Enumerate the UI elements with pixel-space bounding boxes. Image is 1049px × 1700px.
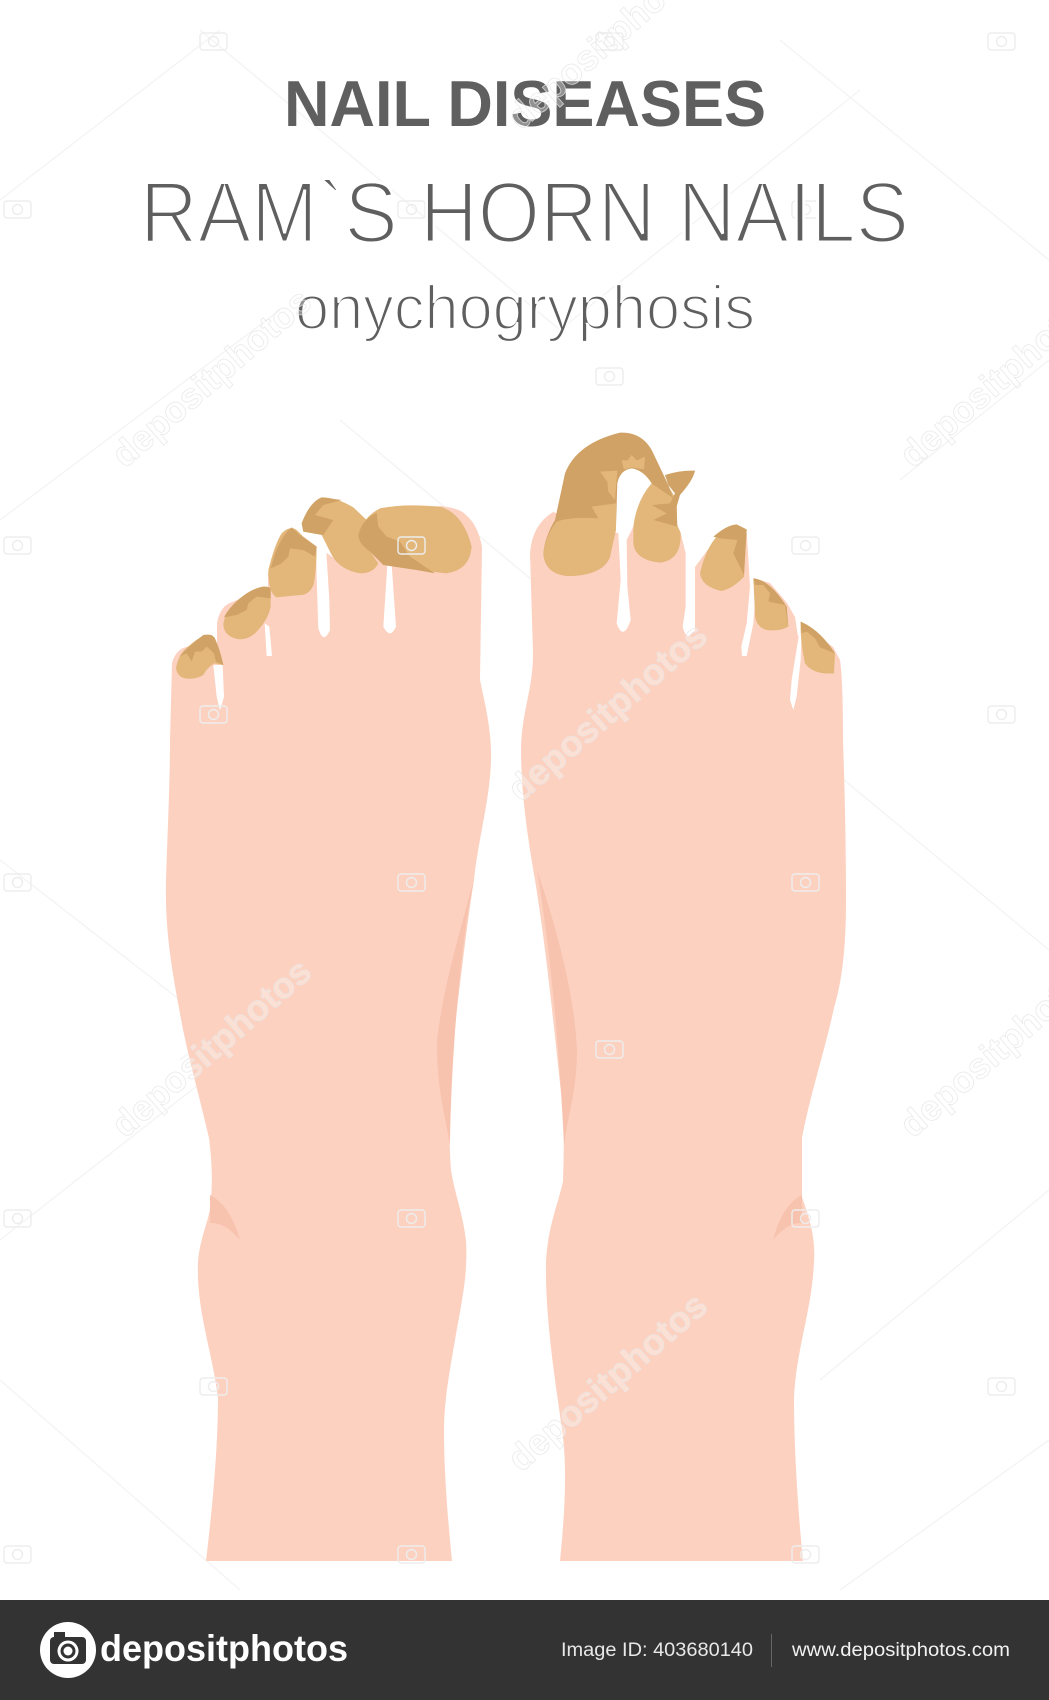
ankle crease: left	[210, 1195, 240, 1240]
website: www.depositphotos.com	[791, 1640, 1010, 1661]
side shadow: left	[437, 878, 474, 1145]
text: depositphotos	[103, 950, 319, 1145]
text: depositphotos	[103, 280, 319, 475]
title: nail diseases: NAIL DISEASES	[284, 67, 766, 140]
subtitle: ram's horn nails: RAM`S HORN NAILS	[140, 165, 909, 261]
toes and nails: left	[176, 497, 472, 711]
nail: fourth toe right	[753, 578, 788, 630]
footer bar	[0, 1600, 1049, 1700]
text: depositphotos	[499, 1284, 715, 1479]
foot body: right	[521, 512, 846, 1561]
heading block	[140, 67, 909, 343]
ankle crease: right	[773, 1195, 802, 1240]
nail: second toe right	[633, 471, 695, 563]
nail: third toe left	[268, 527, 317, 597]
nail: big toe left	[358, 505, 472, 573]
text: depositphotos	[499, 614, 715, 809]
right foot	[521, 433, 846, 1561]
nail: second toe left	[302, 497, 378, 573]
side shadow: right	[537, 870, 577, 1145]
nail: little toe left	[176, 635, 223, 679]
nail: fourth toe left	[223, 587, 271, 639]
nail: curled big toe right	[543, 433, 673, 576]
toes and nails: right	[543, 433, 835, 710]
image id: Image ID: 403680140	[561, 1640, 753, 1661]
left foot	[166, 497, 491, 1561]
brand name: depositphotos	[100, 1628, 348, 1669]
latin name: onychogryphosis: onychogryphosis	[295, 274, 755, 343]
nail: little toe right	[801, 622, 835, 674]
foot body: left	[166, 506, 491, 1561]
nail: third toe right	[700, 524, 747, 591]
icon: camera logo	[40, 1622, 96, 1678]
